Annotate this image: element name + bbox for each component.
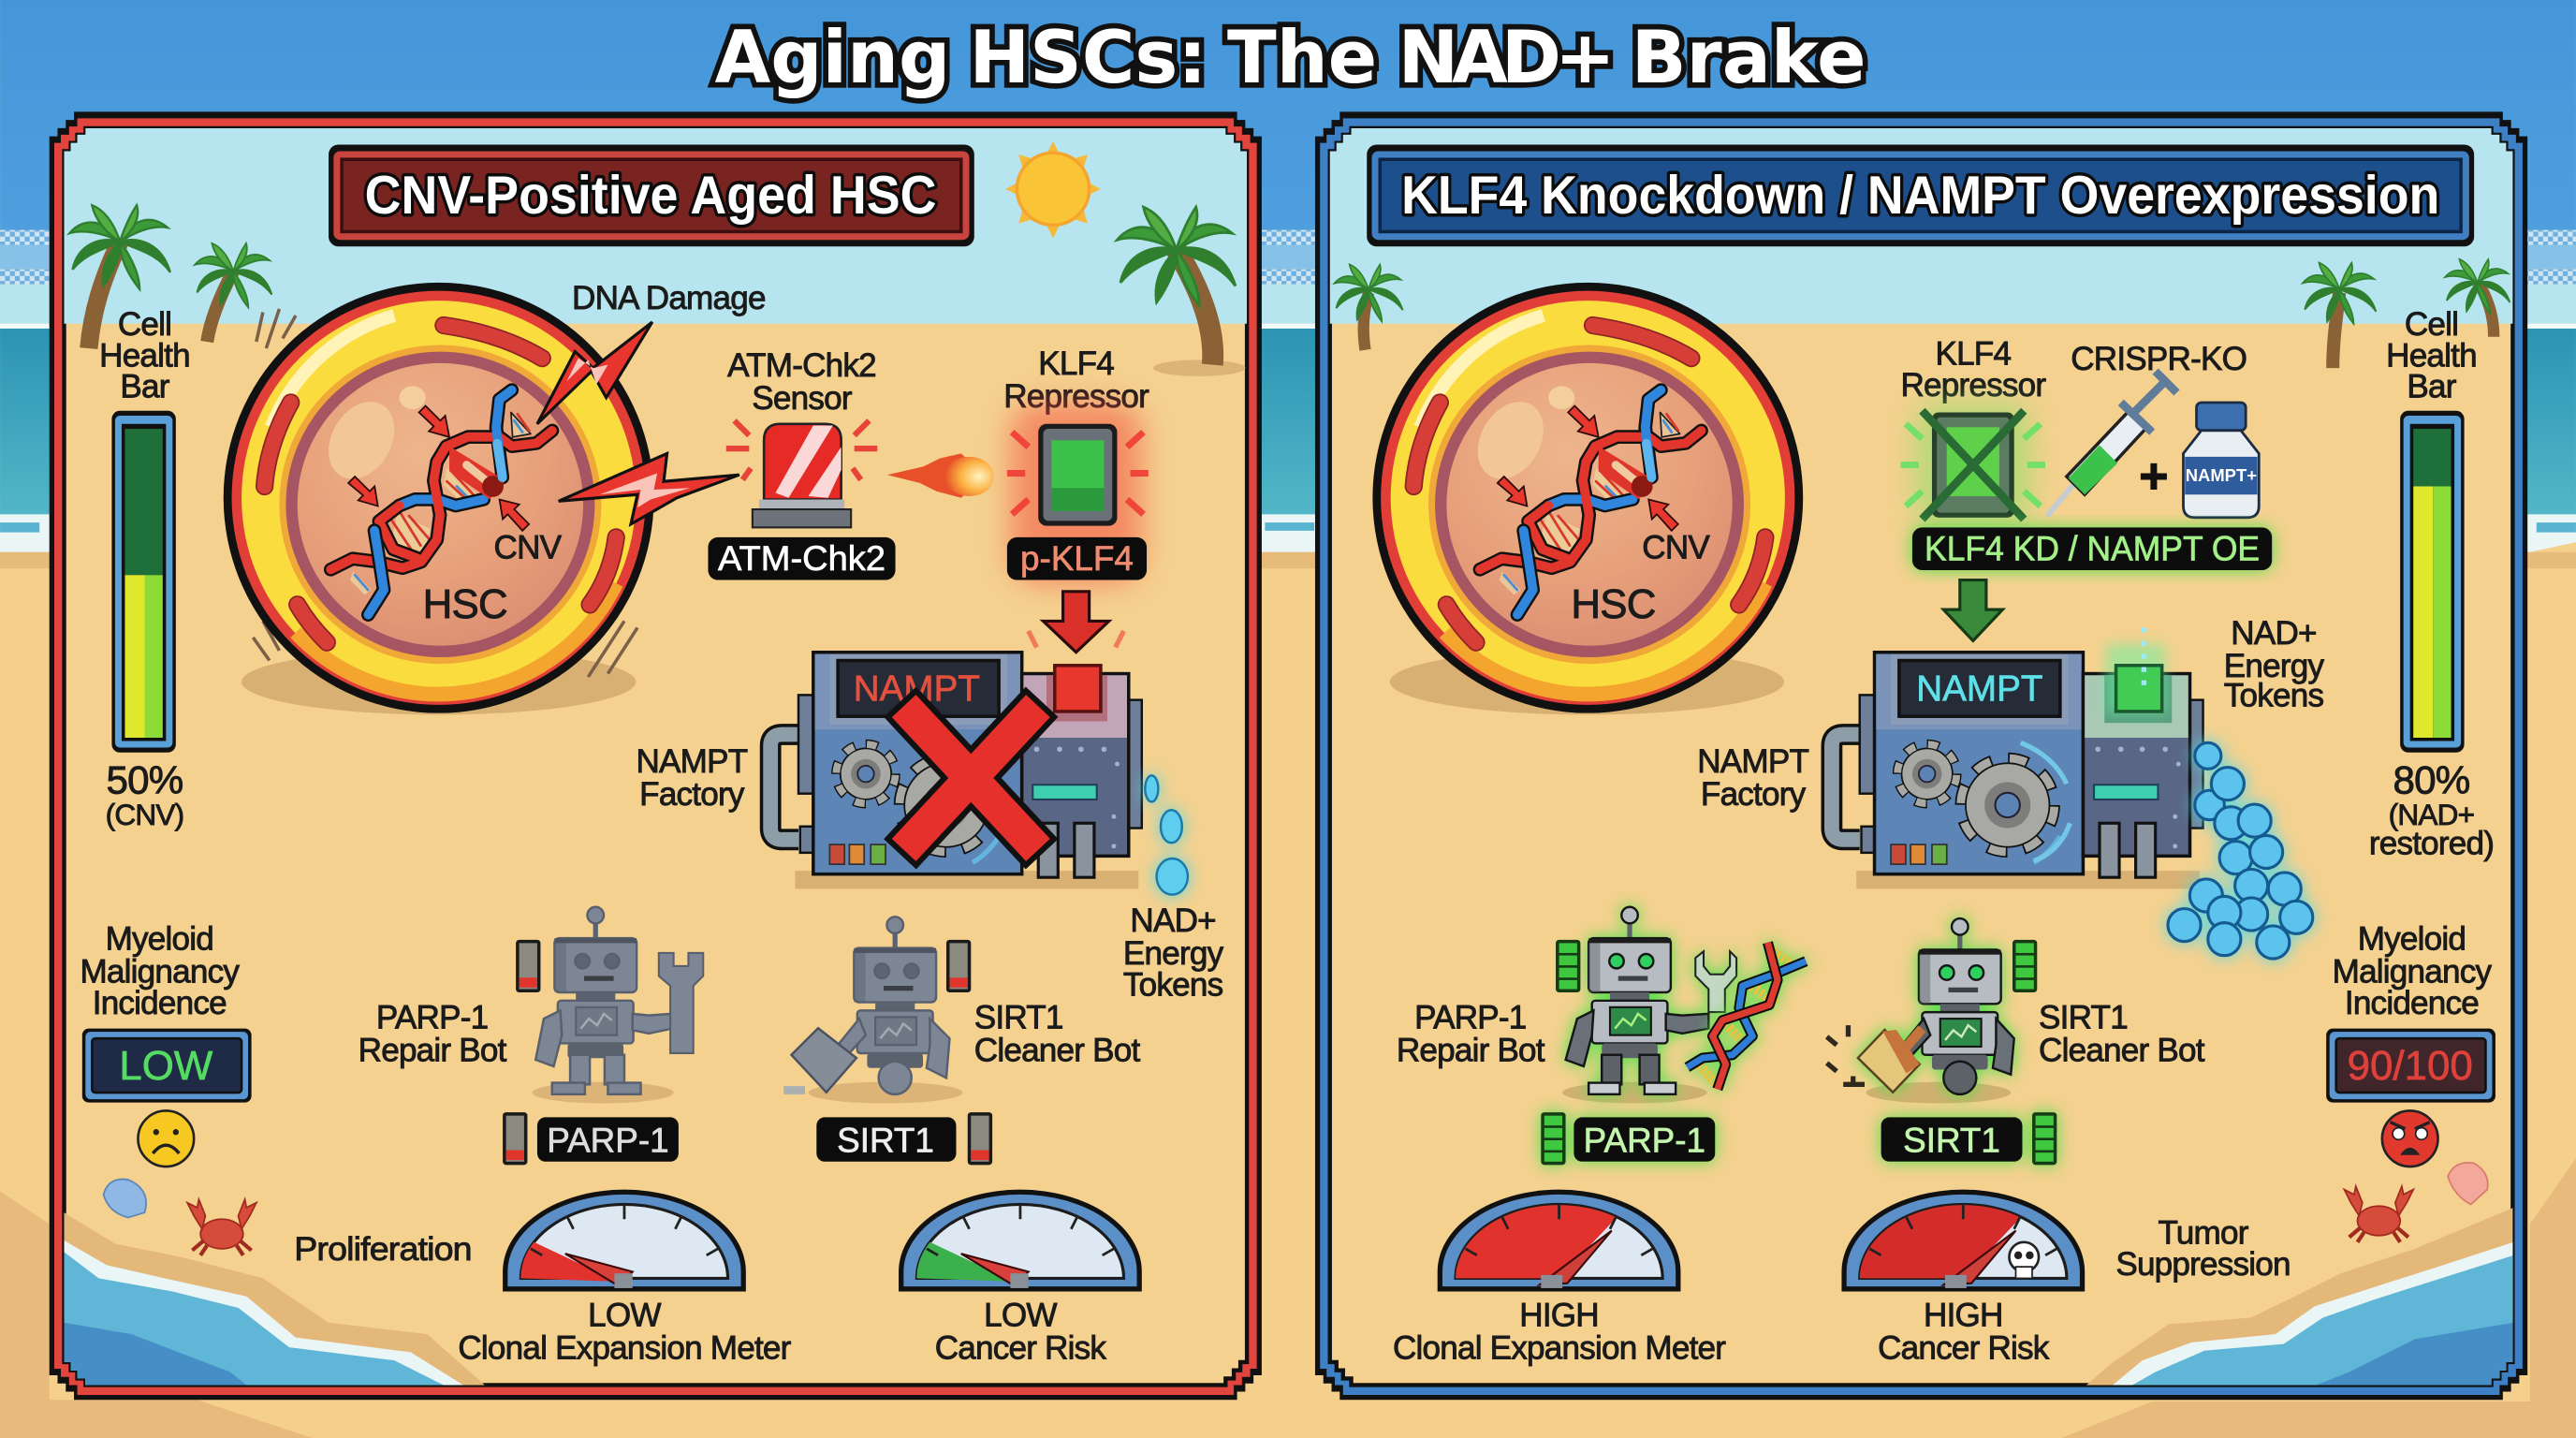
factory monitor: NAMPT: [1916, 669, 2042, 710]
pill: SIRT1 with battery: [1881, 1112, 2056, 1165]
icon: low battery: [516, 940, 540, 992]
label: Malignancy: [80, 954, 240, 990]
gauge: cancer risk high: [1841, 1190, 2085, 1291]
bar: [111, 411, 176, 753]
readout: [2326, 1029, 2496, 1103]
label: DNA damage: DNA Damage: [572, 280, 766, 316]
bar label: [99, 306, 190, 405]
icon: repaired DNA: [1687, 943, 1806, 1089]
label: PARP-1 repair bot: [1397, 1000, 1545, 1069]
label: cancer risk high: Cancer Risk: [1878, 1329, 2050, 1366]
cell labels: [423, 530, 563, 627]
arrow: activation down: [1943, 580, 2002, 640]
cell shadow: [242, 649, 636, 714]
arrow: fireball signal: [887, 453, 994, 498]
label: KLF4 repressor: [1003, 345, 1149, 415]
myeloid malignancy incidence: low: [80, 920, 252, 1167]
label: clonal expansion meter low: [458, 1297, 792, 1366]
NAD+ token pile: [2168, 742, 2313, 959]
bar value: [2369, 758, 2494, 862]
label: cancer risk high: HIGH: [1924, 1297, 2003, 1333]
title: Brake: [1632, 16, 1866, 100]
label: PARP-1 repair bot: Repair Bot: [1397, 1033, 1545, 1069]
panel heading: KLF4 Knockdown / NAMPT Overexpression: [1401, 166, 2439, 226]
cell labels: CNV: [1642, 530, 1710, 566]
panel heading: [329, 144, 974, 246]
label: NAMPT factory: [636, 743, 748, 813]
arrow: inhibition down: [1044, 592, 1109, 653]
icon: broom: [1858, 1029, 1922, 1093]
label: PARP-1 repair bot: [359, 1000, 507, 1069]
energy arcs: [2021, 742, 2070, 861]
panel: KLF4 knockdown / NAMPT overexpression: [1315, 111, 2527, 1400]
label: KLF4 repressor: [1900, 336, 2046, 404]
signal sparks: [1029, 631, 1123, 647]
label: cancer risk high: [1878, 1297, 2050, 1366]
icon: wrench: [1695, 951, 1736, 1012]
pill: PARP-1 with battery: PARP-1: [1584, 1121, 1705, 1159]
bar value: 50%: [107, 758, 183, 802]
green go button: [2085, 627, 2188, 738]
HSC cell: [1372, 283, 1803, 713]
red X over factory: [915, 718, 1027, 838]
cell health bar 80%: [2369, 306, 2494, 862]
label: clonal expansion meter high: HIGH: [1519, 1297, 1599, 1333]
icon: sad face: [138, 1110, 194, 1167]
cell shadow: [1390, 649, 1784, 714]
bar label: Bar: [2407, 369, 2457, 405]
icon: full battery: [1556, 940, 1580, 992]
label: NAD+ energy tokens: [2224, 615, 2324, 714]
bar value: [106, 758, 183, 831]
label: CRISPR-KO: CRISPR-KO: [2071, 341, 2247, 377]
gauge: clonal expansion high: [1438, 1190, 1680, 1291]
label: tumor suppression: Tumor: [2158, 1215, 2249, 1252]
bar value: (NAD+: [2389, 798, 2474, 831]
icon: full battery: [2012, 940, 2037, 992]
bar label: Bar: [120, 369, 170, 405]
pill: PARP-1 with battery: [503, 1112, 679, 1165]
NAD+ token drops: [1145, 775, 1188, 895]
factory monitor: [1899, 661, 2060, 716]
label: clonal expansion meter low: LOW: [588, 1297, 661, 1333]
label: clonal expansion meter high: [1393, 1297, 1726, 1366]
bar label: Health: [99, 337, 190, 374]
label: Incidence: [93, 985, 227, 1021]
label: NAD+ energy tokens: NAD+: [2231, 615, 2317, 652]
pill: PARP-1 with battery: PARP-1: [547, 1121, 669, 1159]
label: NAD+ energy tokens: Energy: [2224, 648, 2324, 684]
label: clonal expansion meter high: Clonal Expansion Meter: [1393, 1329, 1726, 1366]
label: NAD+ energy tokens: Tokens: [2224, 678, 2323, 714]
label: NAMPT factory: NAMPT: [636, 743, 748, 780]
icon: syringe: [2049, 372, 2176, 514]
pill: ATM-Chk2: ATM-Chk2: [718, 539, 886, 578]
label: Myeloid: [2358, 920, 2466, 957]
cell labels: HSC: [423, 581, 507, 627]
gauge: cancer risk low: [899, 1190, 1142, 1291]
label: clonal expansion meter low: Clonal Expansion Meter: [458, 1329, 792, 1366]
label: [2333, 920, 2492, 1021]
icon: shell: [104, 1180, 146, 1217]
gauge: clonal expansion low: [503, 1190, 746, 1291]
bar label: Cell: [118, 306, 171, 343]
palm tree left: [1334, 264, 1403, 350]
HSC cell with damaged DNA: [224, 283, 654, 713]
palm tree small: [195, 243, 271, 342]
icon: crab: [2344, 1186, 2413, 1242]
label: SIRT1 cleaner bot: [974, 1000, 1140, 1069]
SIRT1 cleaner bot, restored: [1827, 918, 2037, 1104]
label: cancer risk low: Cancer Risk: [935, 1329, 1106, 1366]
label: SIRT1 cleaner bot: [2039, 1000, 2205, 1069]
readout: [82, 1029, 252, 1103]
pill: SIRT1 with battery: SIRT1: [1903, 1121, 2000, 1159]
icon: NAMPT+ bottle: NAMPT+: [2186, 465, 2257, 485]
icon: wrench: [659, 953, 703, 1053]
label: cancer risk low: [935, 1297, 1106, 1366]
title: NAD+: [1398, 16, 1609, 100]
SIRT1 cleaner bot, idle: [783, 917, 971, 1104]
label: NAMPT factory: NAMPT: [1697, 743, 1808, 780]
label: cancer risk low: LOW: [984, 1297, 1057, 1333]
label: PARP-1 repair bot: PARP-1: [376, 1000, 488, 1036]
palm tree right: [1117, 207, 1245, 376]
readout: LOW: [119, 1043, 213, 1089]
panel heading: [1367, 144, 2474, 246]
label: PARP-1 repair bot: PARP-1: [1414, 1000, 1527, 1036]
label: ATM-Chk2 sensor: ATM-Chk2: [727, 347, 876, 384]
NAMPT factory, active: [1832, 627, 2203, 888]
myeloid malignancy incidence: 90/100: [2326, 920, 2496, 1167]
title: Aging: [714, 16, 950, 100]
dust: [1827, 1025, 1865, 1086]
bar value: restored): [2369, 826, 2494, 862]
label: SIRT1 cleaner bot: SIRT1: [974, 1000, 1063, 1036]
icon: NAMPT+ bottle: [2183, 403, 2259, 518]
cell labels: [1571, 530, 1710, 627]
label: ATM-Chk2 sensor: [727, 347, 876, 417]
NAMPT factory, blocked: [770, 631, 1142, 888]
title: The: [1227, 16, 1377, 100]
bar: [2400, 411, 2465, 753]
palm tree right: [2445, 259, 2510, 337]
palm tree left: [69, 205, 170, 348]
label: SIRT1 cleaner bot: Cleaner Bot: [974, 1033, 1140, 1069]
icon: broom, grey: [791, 1028, 856, 1093]
label: [80, 920, 240, 1021]
pill: p-KLF4: p-KLF4: [1020, 539, 1134, 578]
icon: skull: [2009, 1242, 2039, 1278]
lightning bolt: DNA damage: [537, 322, 652, 424]
bar label: Health: [2386, 337, 2477, 374]
label: ATM-Chk2 sensor: Sensor: [752, 380, 853, 417]
label: Myeloid: [106, 920, 213, 957]
cell health bar 50%: [99, 306, 190, 831]
label: SIRT1 cleaner bot: SIRT1: [2039, 1000, 2128, 1036]
bar value: (CNV): [106, 798, 183, 831]
lightning bolt: to sensor: [559, 453, 739, 524]
bar value: 80%: [2393, 758, 2469, 802]
pill: SIRT1 with battery: SIRT1: [837, 1121, 934, 1159]
label: NAMPT factory: [1697, 743, 1808, 813]
icon: ATM-Chk2 siren: [726, 420, 877, 527]
label: NAD+ energy tokens: NAD+: [1130, 902, 1216, 939]
bar label: [2386, 306, 2477, 405]
pill: PARP-1 with battery: [1541, 1112, 1715, 1165]
label: tumor suppression: [2115, 1215, 2291, 1283]
label: KLF4 repressor: KLF4: [1038, 345, 1114, 382]
label: tumor suppression: Suppression: [2115, 1246, 2291, 1283]
label: KLF4 repressor: Repressor: [1003, 378, 1149, 415]
pill: KLF4 KD / NAMPT OE: KLF4 KD / NAMPT OE: [1925, 529, 2260, 567]
title: HSCs:: [970, 16, 1207, 100]
label: NAMPT factory: Factory: [639, 776, 745, 813]
palm tree middle: [2303, 263, 2376, 368]
pill: SIRT1 with battery: [816, 1112, 992, 1165]
factory monitor: [838, 661, 999, 716]
cell labels: HSC: [1571, 581, 1656, 627]
label: NAMPT factory: Factory: [1701, 776, 1807, 813]
label: proliferation: Proliferation: [294, 1231, 472, 1268]
cell labels: CNV: [494, 530, 563, 566]
PARP-1 repair bot, idle: [516, 907, 703, 1104]
icon: low battery: [946, 940, 971, 992]
readout: 90/100: [2348, 1043, 2473, 1089]
icon: knocked-down KLF4 switch: [1901, 403, 2045, 527]
cell tremor marks: [253, 309, 637, 677]
dust: [783, 1086, 805, 1094]
icon: active KLF4 switch: [1007, 403, 1149, 583]
red stop button: [1023, 666, 1127, 738]
panel heading: CNV-Positive Aged HSC: [365, 166, 936, 226]
PARP-1 repair bot, restored: [1556, 907, 1806, 1104]
bar label: Cell: [2405, 306, 2458, 343]
icon: sun: [1005, 141, 1101, 238]
label: Incidence: [2345, 985, 2479, 1021]
icon: angry face: [2382, 1110, 2438, 1167]
label: Malignancy: [2333, 954, 2492, 990]
icon: crab: [187, 1199, 256, 1255]
plus sign: [2141, 463, 2167, 490]
label: KLF4 repressor: KLF4: [1935, 336, 2011, 373]
panel: CNV-positive aged HSC: [50, 111, 1262, 1400]
icon: shell: [2448, 1163, 2488, 1204]
label: NAD+ energy tokens: [1123, 902, 1224, 1004]
label: KLF4 repressor: Repressor: [1900, 367, 2046, 404]
factory monitor: NAMPT: [854, 669, 980, 710]
label: NAD+ energy tokens: Energy: [1123, 935, 1224, 972]
label: SIRT1 cleaner bot: Cleaner Bot: [2039, 1033, 2205, 1069]
label: PARP-1 repair bot: Repair Bot: [359, 1033, 507, 1069]
label: NAD+ energy tokens: Tokens: [1123, 967, 1223, 1004]
